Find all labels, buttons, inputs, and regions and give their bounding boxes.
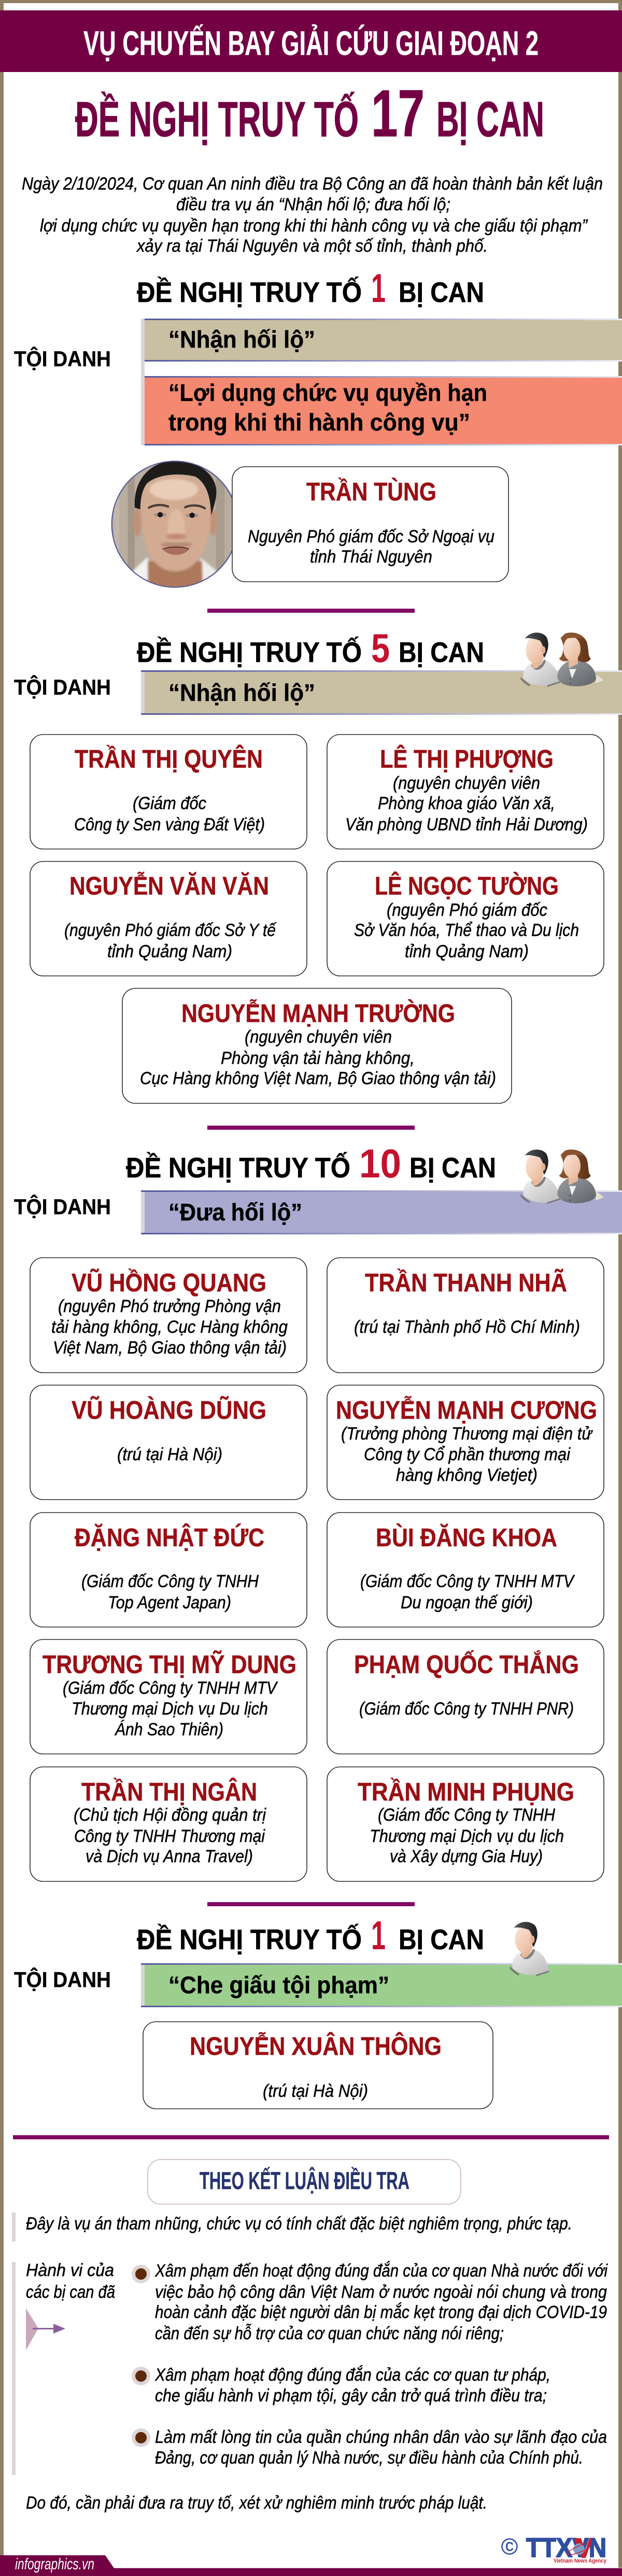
card: Nguyễn Văn Văn [30,861,307,976]
charge bar: lợi dụng chức vụ [141,376,622,445]
card: Trần Tùng: TRẦN TÙNG [306,478,436,506]
logo: TTXVN: Vietnam News Agency [554,2558,607,2564]
card: Phạm Quốc Thắng: PHẠM QUỐC THẮNG [354,1650,579,1679]
bullet 3 [132,2427,607,2468]
card: Đặng Nhật Đức: ĐẶNG NHẬT ĐỨC [75,1523,264,1552]
charge bar: che giấu tội phạm: “Che giấu tội phạm” [168,1971,389,1998]
card: Trần Thanh Nhã: (trú tại Thành phố Hồ Chí Minh) [354,1317,580,1337]
charge bar: nhận hối lộ: “Nhận hối lộ” [168,679,315,706]
card: Nguyễn Xuân Thông: NGUYỄN XUÂN THÔNG [190,2032,442,2061]
card: Vũ Hoàng Dũng [30,1385,307,1500]
logo: TTXVN: C [505,2540,514,2554]
arrow [26,2308,65,2350]
card: Trần Tùng [232,467,508,582]
left label: các bị can đã [26,2282,115,2302]
card: Trần Tùng: tỉnh Thái Nguyên [310,547,432,567]
card: Vũ Hoàng Dũng: (trú tại Hà Nội) [117,1445,222,1464]
icon: two people [520,632,604,687]
card: Lê Thị Phượng: (nguyên chuyên viên [393,773,540,793]
card: Trương Thị Mỹ Dung: TRƯƠNG THỊ MỸ DUNG [43,1651,296,1679]
main heading: BỊ CAN [436,92,544,147]
section: 10 defendants [14,1141,622,1881]
statement [12,2212,572,2241]
logo: TTXVN: TTXVN [526,2533,606,2563]
card: Phạm Quốc Thắng: (Giám đốc Công ty TNHH PNR) [359,1699,574,1719]
card: Bùi Đăng Khoa [327,1513,604,1627]
conclusion heading [148,2160,461,2204]
card: Nguyễn Mạnh Trường: Phòng vận tải hàng không, [221,1048,415,1068]
behaviours panel [12,2261,608,2475]
card: Vũ Hoàng Dũng: VŨ HOÀNG DŨNG [72,1397,266,1424]
bullet 2: che giấu hành vi phạm tội, gây cản trở quá trình điều tra; [155,2386,547,2406]
card: Nguyễn Mạnh Cương: (Trưởng phòng Thương mại điện tử [341,1424,593,1444]
card: Trần Thanh Nhã: TRẦN THANH NHÃ [365,1269,567,1297]
card: Nguyễn Văn Văn: NGUYỄN VĂN VĂN [69,872,269,900]
card: Nguyễn Văn Văn: tỉnh Quảng Nam) [107,942,232,961]
header band [0,10,622,72]
section heading: ĐỀ NGHỊ TRUY TỐ [137,636,362,668]
label: tội danh: TỘI DANH [14,1967,111,1992]
bullet 1: cần đến sự hỗ trợ của cơ quan chức năng nói riêng; [155,2324,504,2343]
card: Lê Ngọc Tường: (nguyên Phó giám đốc [387,900,547,920]
card: Trần Thanh Nhã [327,1258,604,1373]
card: Nguyễn Xuân Thông: (trú tại Hà Nội) [263,2081,368,2101]
card: Lê Ngọc Tường: tỉnh Quảng Nam) [405,942,529,961]
intro text [22,174,603,256]
card: Trần Thị Ngân: TRẦN THỊ NGÂN [81,1778,257,1806]
card: Bùi Đăng Khoa: (Giám đốc Công ty TNHH MTV [360,1572,575,1591]
card: Trần Thị Ngân [30,1767,307,1881]
card: Trần Thị Ngân: Công ty TNHH Thương mại [74,1826,265,1846]
card: Trần Minh Phụng [327,1767,604,1881]
conclusion line: Do đó, cần phải đưa ra truy tố, xét xử nghiêm minh trước pháp luật. [26,2493,487,2513]
card: Nguyễn Mạnh Cương [327,1385,604,1500]
card: Trương Thị Mỹ Dung: Ánh Sao Thiên) [114,1720,223,1739]
card: Lê Thị Phượng: Phòng khoa giáo Văn xã, [378,794,555,813]
card: Nguyễn Mạnh Cương: Công ty Cổ phần thương mại [364,1445,571,1464]
label: tội danh: TỘI DANH [14,346,111,371]
card: Trần Thị Quyên: Công ty Sen vàng Đất Việt) [74,815,265,834]
charge bar: nhận hối lộ [141,670,622,715]
card: Đặng Nhật Đức: (Giám đốc Công ty TNHH [81,1572,259,1591]
section heading [126,1141,496,1186]
charge bar: đưa hối lộ: “Đưa hối lộ” [168,1199,302,1226]
card: Nguyễn Văn Văn: (nguyên Phó giám đốc Sở Y tế [64,920,277,940]
card: Bùi Đăng Khoa: BÙI ĐĂNG KHOA [376,1523,557,1552]
footer band [0,2555,622,2576]
section heading: BỊ CAN [399,1923,484,1955]
section heading: ĐỀ NGHỊ TRUY TỐ [126,1152,350,1184]
charge bar: đưa hối lộ [141,1190,622,1234]
section heading: BỊ CAN [409,1152,496,1184]
intro text: điều tra vụ án “Nhận hối lộ; đưa hối lộ; [176,195,450,214]
card: Bùi Đăng Khoa: Du ngoạn thế giới) [401,1593,533,1613]
card: Trần Thị Quyên: (Giám đốc [133,794,206,813]
card: Vũ Hồng Quang [30,1258,307,1373]
main heading [75,77,544,151]
charge bar: nhận hối lộ: “Nhận hối lộ” [168,326,315,353]
section heading: 1 [371,1912,386,1958]
card: Vũ Hồng Quang: VŨ HỒNG QUANG [72,1269,266,1297]
section heading: 1 [371,265,386,311]
section heading: ĐỀ NGHỊ TRUY TỐ [137,276,362,308]
label: tội danh: TỘI DANH [14,674,111,699]
section: 1 defendant [14,265,622,594]
card: Lê Thị Phượng: LÊ THỊ PHƯỢNG [380,745,554,773]
source: infographics.vn [15,2555,94,2573]
card: Nguyễn Mạnh Trường: Cục Hàng không Việt Nam, Bộ Giao thông vận tải) [140,1069,496,1088]
charge bar: che giấu tội phạm [141,1963,622,2007]
card: Lê Ngọc Tường: Sở Văn hóa, Thể thao và Du lịch [354,920,579,940]
main heading: 17 [371,77,425,151]
card: Đặng Nhật Đức: Top Agent Japan) [108,1593,231,1613]
card: Trần Minh Phụng: TRẦN MINH PHỤNG [358,1778,574,1806]
card: Trần Minh Phụng: (Giám đốc Công ty TNHH [378,1805,555,1825]
intro text: xảy ra tại Thái Nguyên và một số tỉnh, thành phố. [136,236,488,256]
card: Trương Thị Mỹ Dung: (Giám đốc Công ty TNHH MTV [63,1678,278,1698]
card: Trần Minh Phụng: Thương mại Dịch vụ du lịch [370,1826,564,1846]
card: Vũ Hồng Quang: (nguyên Phó trưởng Phòng vận [58,1297,281,1316]
icon: person [510,1922,549,1976]
card: Trương Thị Mỹ Dung: Thương mại Dịch vụ Du lịch [72,1699,268,1719]
left label [26,2261,115,2302]
bullet 1 [132,2261,608,2343]
card: Nguyễn Mạnh Trường: (nguyên chuyên viên [245,1027,392,1047]
portrait photo [111,460,232,588]
main heading: ĐỀ NGHỊ TRUY TỐ [75,91,359,147]
card: Nguyễn Xuân Thông [143,2022,493,2109]
conclusion heading: THEO KẾT LUẬN ĐIỀU TRA [200,2167,409,2194]
section heading [137,265,484,311]
card: Lê Thị Phượng: Văn phòng UBND tỉnh Hải Dương) [345,815,588,834]
section heading [137,625,484,671]
card: Nguyễn Mạnh Cương: hàng không Vietjet) [396,1465,538,1485]
card: Nguyễn Mạnh Trường: NGUYỄN MẠNH TRƯỜNG [181,999,455,1028]
section heading: 5 [371,625,390,671]
card: Lê Thị Phượng [327,735,604,849]
label: tội danh: TỘI DANH [14,1194,111,1219]
card: Đặng Nhật Đức [30,1513,307,1627]
intro text: lợi dụng chức vụ quyền hạn trong khi thi hành công vụ và che giấu tội phạm” [40,216,588,236]
card: Trương Thị Mỹ Dung [30,1639,307,1754]
section heading: BỊ CAN [399,276,484,308]
section: 1 defendant, concealment [14,1912,622,2109]
left label: Hành vi của [26,2261,114,2280]
icon: two people [520,1149,604,1204]
charge bar: nhận hối lộ [141,319,622,362]
card: Phạm Quốc Thắng [327,1639,604,1754]
card: Trần Thị Quyên: TRẦN THỊ QUYÊN [75,745,263,773]
charge bar: lợi dụng chức vụ: “Lợi dụng chức vụ quyền hạn [168,379,487,406]
bullet 2 [132,2365,550,2406]
card: Trần Thị Ngân: (Chủ tịch Hội đồng quản trị [74,1805,266,1825]
logo: TTXVN [502,2533,607,2564]
card: Trần Thị Ngân: và Dịch vụ Anna Travel) [86,1847,253,1866]
card: Trần Thị Quyên [30,735,307,849]
card: Vũ Hồng Quang: tải hàng không, Cục Hàng không [51,1317,288,1337]
section heading [137,1912,484,1958]
card: Trần Tùng: Nguyên Phó giám đốc Sở Ngoại vụ [248,527,494,546]
bullet 2: Xâm phạm hoạt động đúng đắn của các cơ quan tư pháp, [154,2365,550,2385]
charge bar: lợi dụng chức vụ: trong khi thi hành công vụ” [168,409,470,436]
section: 5 defendants [14,625,622,1103]
section heading: BỊ CAN [399,636,484,668]
card: Nguyễn Mạnh Trường [122,988,512,1103]
card: Lê Ngọc Tường: LÊ NGỌC TƯỜNG [375,872,559,900]
section heading: 10 [359,1141,401,1186]
card: Vũ Hồng Quang: Việt Nam, Bộ Giao thông vận tải) [53,1338,287,1358]
card: Trần Minh Phụng: và Xây dựng Gia Huy) [390,1847,543,1866]
card: Lê Ngọc Tường [327,861,604,976]
section heading: ĐỀ NGHỊ TRUY TỐ [137,1923,362,1955]
